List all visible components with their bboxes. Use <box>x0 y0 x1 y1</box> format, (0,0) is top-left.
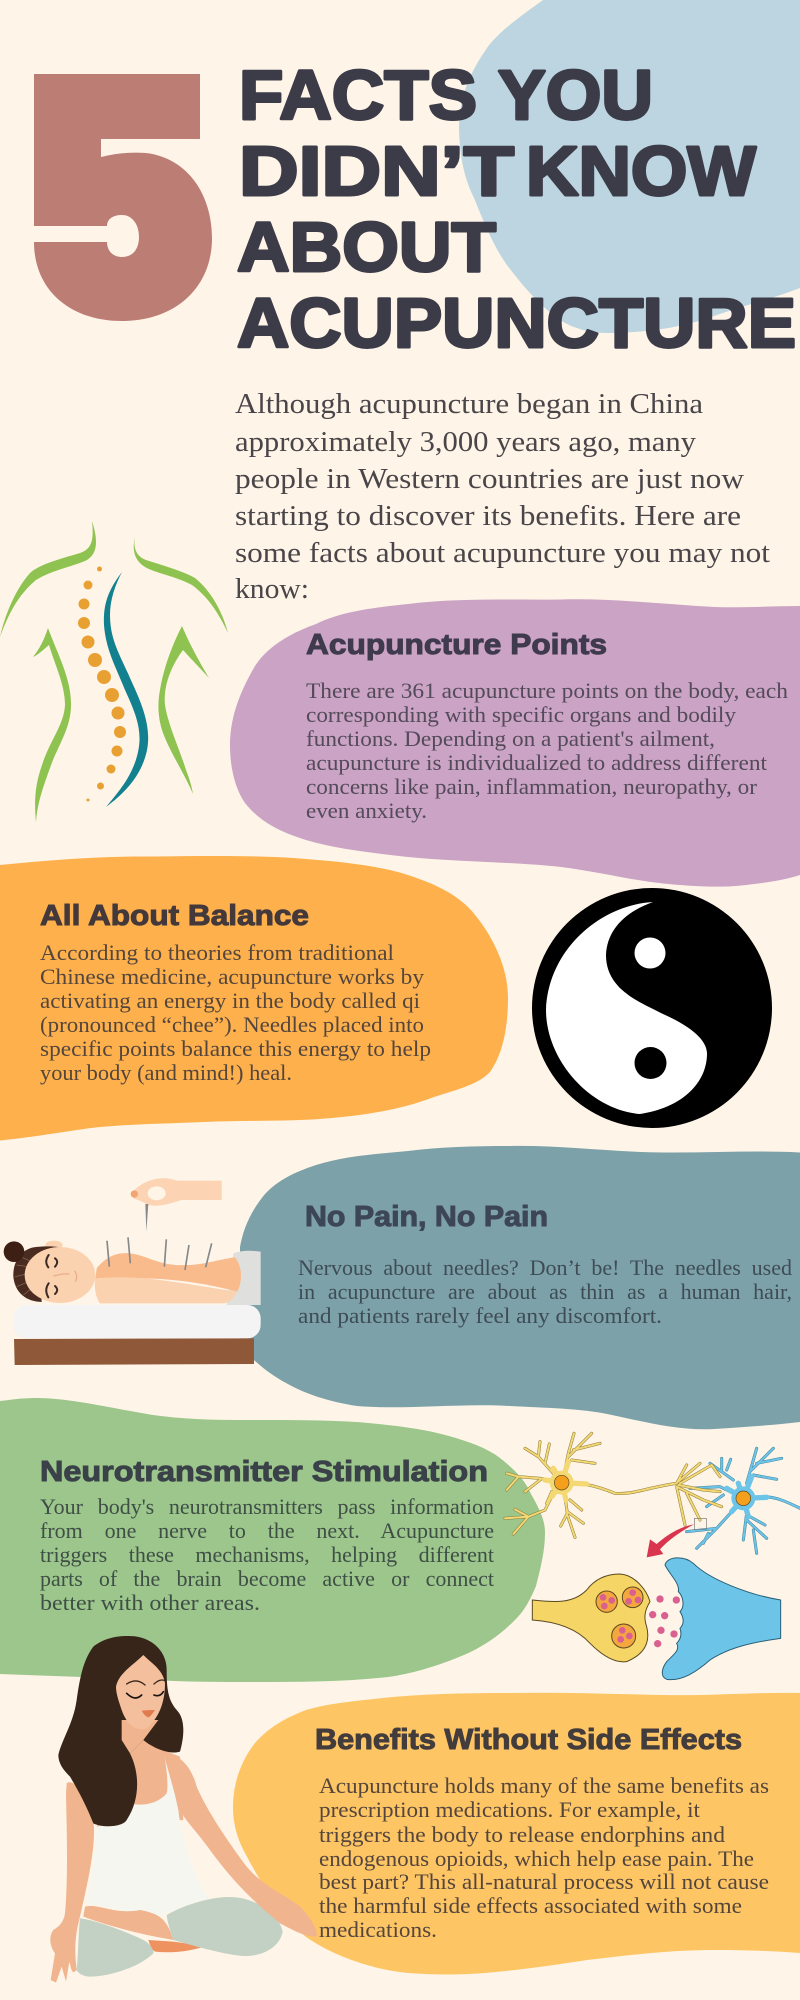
intro paragraph: know: <box>235 574 309 605</box>
panel: benefits without side effects: Acupuncture holds many of the same benefits as <box>319 1773 769 1798</box>
background blob: blue <box>459 0 800 333</box>
panel: benefits without side effects: triggers the body to release endorphins and <box>319 1822 725 1847</box>
panel: neurotransmitter stimulation: Neurotransmitter Stimulation <box>40 1456 488 1488</box>
panel: no pain, no pain: No Pain, No Pain <box>305 1201 548 1233</box>
intro paragraph: some facts about acupuncture you may not <box>235 538 770 569</box>
panel: acupuncture points: acupuncture is individualized to address different <box>306 750 767 775</box>
panel: all about balance <box>0 856 508 1140</box>
panel: benefits without side effects: best part? This all-natural process will not cause <box>319 1869 769 1894</box>
panel: acupuncture points: concerns like pain, inflammation, neuropathy, or <box>306 774 758 799</box>
intro paragraph <box>235 389 770 605</box>
intro paragraph: starting to discover its benefits. Here are <box>235 501 741 532</box>
icon: acupuncture treatment <box>4 1178 261 1365</box>
title: FACTS <box>239 56 477 134</box>
panel: benefits without side effects: medications. <box>319 1917 437 1942</box>
panel: neurotransmitter stimulation: better with other areas. <box>40 1590 260 1615</box>
icon: neurons and synapse <box>505 1433 800 1680</box>
panel: benefits without side effects: endogenous opioids, which help ease pain. The <box>319 1846 754 1871</box>
panel: no pain, no pain <box>240 1146 800 1429</box>
panel: acupuncture points: There are 361 acupuncture points on the body, each <box>306 678 788 703</box>
synapse <box>532 1558 781 1680</box>
icon: spine and torso <box>0 521 228 823</box>
panel: acupuncture points: functions. Depending on a patient's ailment, <box>306 726 715 751</box>
icon: yin yang <box>532 888 772 1128</box>
panel: benefits without side effects: Benefits Without Side Effects <box>315 1724 742 1756</box>
title: ABOUT <box>237 208 496 286</box>
panel: all about balance: specific points balance this energy to help <box>40 1036 431 1061</box>
panel: all about balance: (pronounced “chee”). Needles placed into <box>40 1012 424 1037</box>
icon: meditating woman <box>50 1636 317 1983</box>
panel: all about balance: your body (and mind!) heal. <box>40 1060 292 1085</box>
panel: no pain, no pain: and patients rarely feel any discomfort. <box>298 1303 662 1328</box>
panel: all about balance: activating an energy in the body called qi <box>40 988 420 1013</box>
intro paragraph: approximately 3,000 years ago, many <box>235 427 696 458</box>
panel: acupuncture points: Acupuncture Points <box>306 629 607 661</box>
intro paragraph: people in Western countries are just now <box>235 464 745 495</box>
title: YOU <box>498 56 653 134</box>
panel: neurotransmitter stimulation <box>0 1398 545 1682</box>
big number 5 <box>34 74 212 321</box>
panel: all about balance: Chinese medicine, acupuncture works by <box>40 964 424 989</box>
panel: acupuncture points <box>230 599 800 887</box>
title: KNOW <box>526 132 756 210</box>
panel: benefits without side effects: prescription medications. For example, it <box>319 1797 700 1822</box>
panel: all about balance: All About Balance <box>40 900 309 932</box>
panel: benefits without side effects: the harmful side effects associated with some <box>319 1893 742 1918</box>
yellow neuron <box>505 1433 722 1537</box>
blue neuron <box>687 1448 800 1553</box>
panel: acupuncture points: corresponding with specific organs and bodily <box>306 702 736 727</box>
panel: acupuncture points: even anxiety. <box>306 798 427 823</box>
arrow: red pointer to synapse <box>647 1524 694 1557</box>
title: ACUPUNCTURE <box>237 284 796 362</box>
title: DIDN’T <box>239 132 514 210</box>
title <box>237 56 796 362</box>
panel: all about balance: According to theories from traditional <box>40 940 394 965</box>
panel: benefits without side effects <box>233 1693 800 1974</box>
intro paragraph: Although acupuncture began in China <box>235 389 704 420</box>
